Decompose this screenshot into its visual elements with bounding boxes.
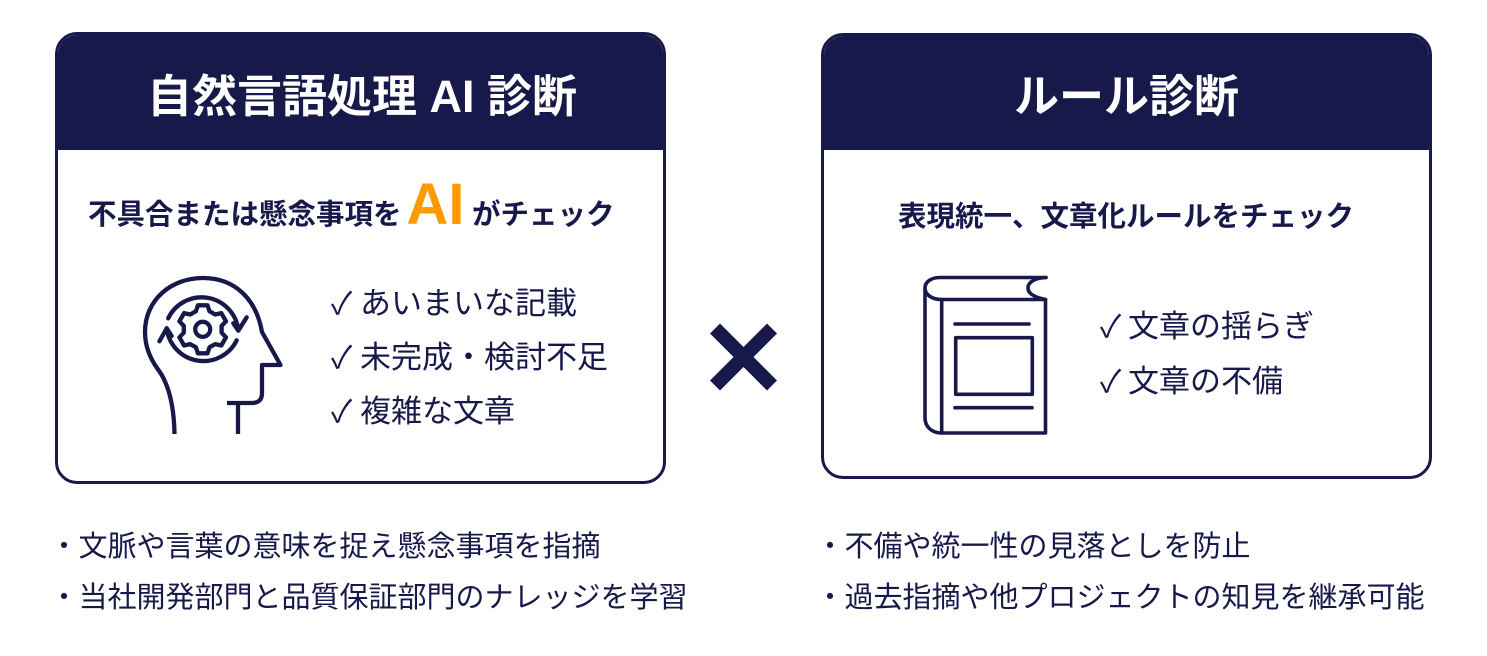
item: 文章の不備 — [1128, 364, 1283, 399]
heading: natural language AI diagnosis: 自然言語処理 AI 診断 — [147, 71, 577, 122]
panel header background — [58, 35, 663, 150]
bullet: ・過去指摘や他プロジェクトの知見を継承可能 — [816, 582, 1425, 614]
item: 複雑な文章 — [360, 394, 515, 429]
item: ✓ — [331, 340, 352, 375]
item: あいまいな記載 — [360, 286, 577, 321]
bullet: ・不備や統一性の見落としを防止 — [816, 531, 1251, 563]
subheading: rule check: 表現統一、文章化ルールをチェック — [898, 201, 1354, 233]
bullets: rules — [816, 531, 1425, 614]
subheading: AI check: 不具合または懸念事項を — [88, 199, 402, 231]
panel header background — [824, 36, 1429, 150]
subheading: AI check: がチェック — [472, 199, 615, 231]
panel: rule diagnosis — [821, 33, 1432, 479]
bullet: ・文脈や言葉の意味を捉え懸念事項を指摘 — [50, 531, 601, 563]
checklist: rules — [1100, 309, 1314, 399]
subheading: AI check: AI — [406, 172, 464, 237]
item: ✓ — [331, 394, 352, 429]
bullets: AI — [50, 531, 688, 614]
item: 未完成・検討不足 — [360, 340, 608, 375]
item: ✓ — [331, 286, 352, 321]
checklist: AI — [331, 286, 608, 429]
heading: rule diagnosis: ルール診断 — [1014, 71, 1239, 122]
item: ✓ — [1100, 309, 1121, 344]
panel: natural language AI diagnosis — [55, 32, 666, 484]
bullet: ・当社開発部門と品質保証部門のナレッジを学習 — [50, 582, 688, 614]
item: ✓ — [1100, 364, 1121, 399]
item: 文章の揺らぎ — [1128, 309, 1314, 344]
subheading: AI check — [88, 172, 615, 237]
